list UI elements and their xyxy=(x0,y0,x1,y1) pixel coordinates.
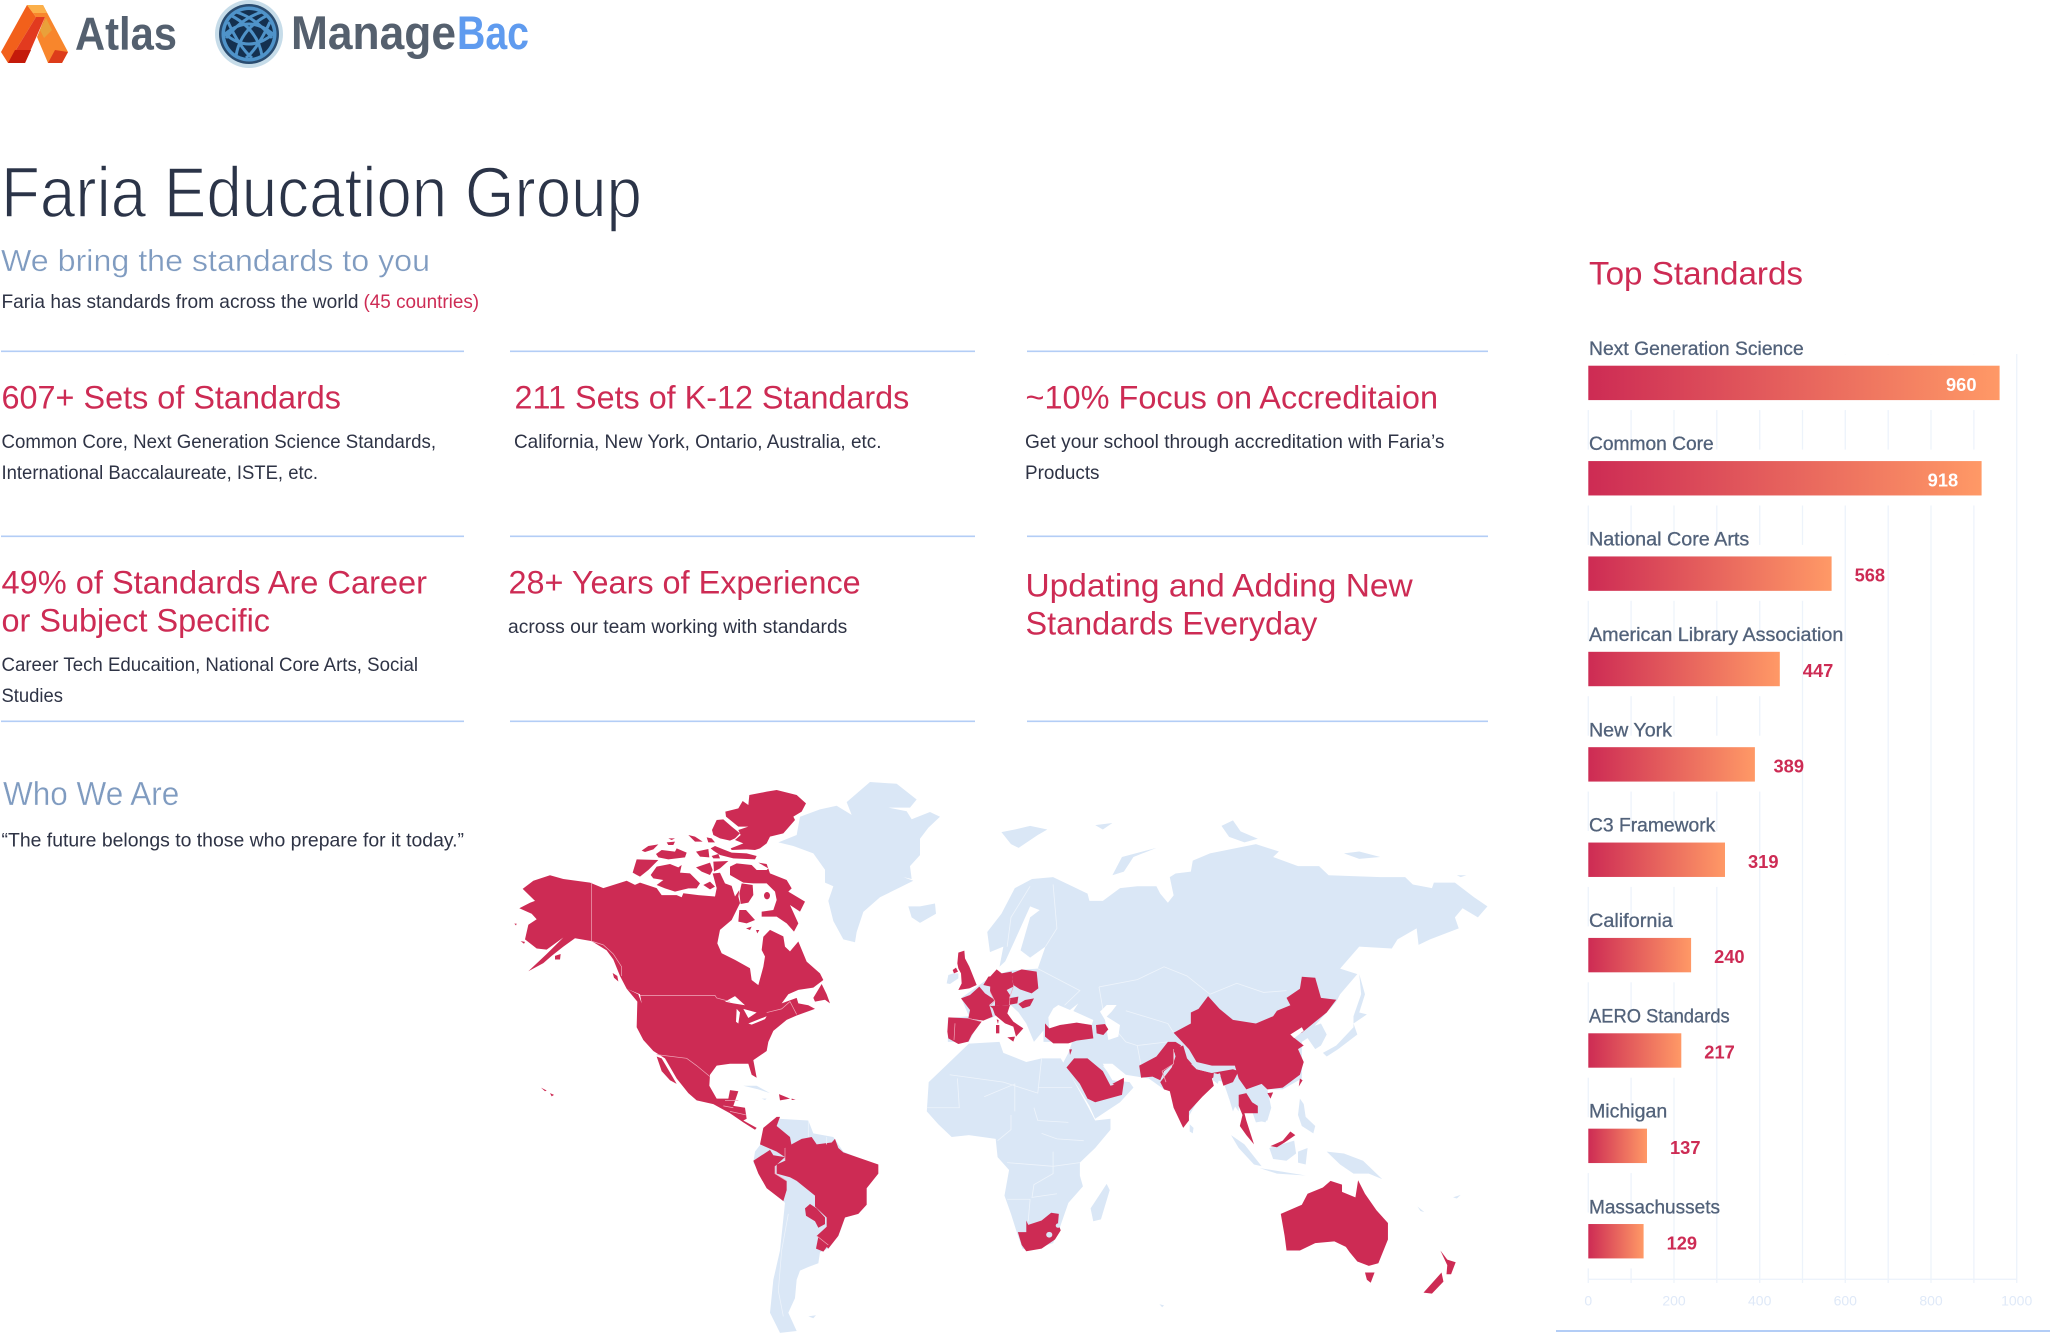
stat: updating and adding standards xyxy=(1026,568,1414,642)
South America xyxy=(753,1119,878,1333)
bar: Next Generation Science: Next Generation Science xyxy=(1589,339,1804,360)
bottom rule xyxy=(1556,1330,2050,1332)
bar: Next Generation Science xyxy=(1588,339,2000,400)
enclaves in light blue xyxy=(1046,1064,1221,1238)
bar: Michigan: 137 xyxy=(1670,1138,1700,1158)
x axis labels: 800 xyxy=(1919,1293,1943,1309)
Ireland xyxy=(947,973,958,984)
stat: 49% career or subject specific: Studies xyxy=(2,685,63,707)
Arabian sea inlet xyxy=(1103,1066,1126,1078)
stat: updating and adding standards: Updating and Adding New xyxy=(1026,568,1414,604)
stat: 211 sets of K-12 standards xyxy=(514,379,909,453)
x axis labels: 1000 xyxy=(2001,1293,2032,1309)
highlighted European countries xyxy=(947,951,1108,1055)
bar: Massachussets xyxy=(1588,1197,1720,1258)
stat: 49% career or subject specific: or Subject Specific xyxy=(2,603,270,639)
stat: 211 sets of K-12 standards: California, New York, Ontario, Australia, etc. xyxy=(514,431,882,453)
Iceland xyxy=(908,903,936,923)
highlighted countries of Asia, Africa and Oceania xyxy=(1018,977,1456,1294)
stat: 10% focus on accreditation: ~10% Focus on Accreditaion xyxy=(1026,379,1438,415)
islands in light blue xyxy=(1001,820,1466,1307)
stat: 607+ sets of standards: International Baccalaureate, ISTE, etc. xyxy=(2,462,318,484)
South American highlighted countries xyxy=(753,1117,878,1252)
bar: Common Core: 918 xyxy=(1928,470,1958,490)
bar: Common Core: Common Core xyxy=(1589,434,1714,455)
bar chart: top standards xyxy=(1577,339,2032,1309)
bar: AERO Standards xyxy=(1588,1006,1735,1068)
bar: National Core Arts xyxy=(1588,529,1885,591)
bar: Next Generation Science: 960 xyxy=(1946,375,1976,395)
intro sentence: (45 countries) xyxy=(364,291,479,313)
chart gridlines xyxy=(1588,354,2017,1283)
wordmark: Atlas: Atlas xyxy=(75,7,177,59)
country borders on light land xyxy=(927,884,1287,1221)
small North American islands xyxy=(514,924,830,1100)
heading: who we are: Who We Are xyxy=(3,775,179,812)
logo: Atlas xyxy=(1,5,177,63)
bar: Massachussets: Massachussets xyxy=(1589,1197,1720,1218)
x axis labels: 0 xyxy=(1584,1293,1592,1309)
stat: 211 sets of K-12 standards: 211 Sets of K-12 Standards xyxy=(514,379,909,415)
Eurasia xyxy=(948,844,1487,1126)
stat: 10% focus on accreditation xyxy=(1025,379,1445,484)
stat: 607+ sets of standards: 607+ Sets of Standards xyxy=(2,379,341,415)
stat: 28+ years of experience: 28+ Years of Experience xyxy=(508,564,861,600)
bar: Michigan: Michigan xyxy=(1589,1102,1667,1123)
title: Faria Education Group xyxy=(1,154,642,233)
bar: C3 Framework xyxy=(1588,816,1778,877)
wordmark: ManageBac: Manage xyxy=(291,6,456,59)
Belgium and Czechia in light blue xyxy=(980,986,1025,996)
x axis labels xyxy=(1584,1293,2032,1309)
bar: California: 240 xyxy=(1714,947,1745,967)
logo: ManageBac xyxy=(215,0,529,68)
icon: globe xyxy=(215,0,283,68)
bar: Massachussets: 129 xyxy=(1667,1233,1697,1253)
world map xyxy=(514,782,1487,1333)
map: Europe, Africa, Asia and Oceania xyxy=(927,820,1487,1307)
bar: American Library Association: 447 xyxy=(1803,661,1833,681)
stat: 10% focus on accreditation: Products xyxy=(1025,462,1100,484)
stat: 28+ years of experience xyxy=(508,564,861,638)
bar: New York xyxy=(1588,720,1804,782)
bar: AERO Standards: 217 xyxy=(1704,1043,1735,1063)
quote: “The future belongs to those who prepare for it today.” xyxy=(2,830,464,852)
intro sentence: Faria has standards from across the world xyxy=(2,291,358,313)
Baja California xyxy=(657,1056,677,1084)
bar: Michigan xyxy=(1588,1102,1700,1163)
bar: National Core Arts: 568 xyxy=(1855,566,1885,586)
x axis labels: 600 xyxy=(1834,1293,1857,1309)
bar: AERO Standards: AERO Standards xyxy=(1589,1006,1730,1027)
Black Sea and Caspian Sea xyxy=(1048,1003,1120,1040)
bar: American Library Association: American Library Association xyxy=(1589,625,1843,646)
x axis labels: 400 xyxy=(1748,1293,1772,1309)
bar: C3 Framework: 319 xyxy=(1748,852,1778,872)
stat: 607+ sets of standards: Common Core, Next Generation Science Standards, xyxy=(2,431,436,453)
icon: Atlas mountain mark xyxy=(1,5,68,63)
bar: New York: New York xyxy=(1589,720,1673,741)
stat: 607+ sets of standards xyxy=(2,379,436,484)
heading: top standards: Top Standards xyxy=(1589,255,1803,291)
stat: 49% career or subject specific xyxy=(2,564,427,707)
stat: 10% focus on accreditation: Get your school through accreditation with Faria’s xyxy=(1025,431,1445,453)
map: Canadian Arctic islands xyxy=(633,790,806,933)
bar: C3 Framework: C3 Framework xyxy=(1589,816,1716,837)
bar: National Core Arts: National Core Arts xyxy=(1589,529,1749,550)
panel: key statistics xyxy=(1,351,1488,721)
map: Europe and Turkey xyxy=(947,951,1120,1055)
bar: California xyxy=(1588,911,1745,972)
Africa xyxy=(927,1042,1110,1250)
logo: ManageBac: Bac xyxy=(457,6,529,59)
stat: updating and adding standards: Standards Everyday xyxy=(1026,606,1317,642)
North America xyxy=(519,873,823,1130)
bar: American Library Association xyxy=(1588,625,1843,686)
subtitle: We bring the standards to you xyxy=(1,243,430,278)
x axis labels: 200 xyxy=(1662,1293,1686,1309)
bar: New York: 389 xyxy=(1774,756,1804,776)
Caribbean islands xyxy=(743,1086,770,1100)
stat: 28+ years of experience: across our team working with standards xyxy=(508,616,848,638)
bar: Common Core xyxy=(1588,434,1982,495)
stat: 49% career or subject specific: Career Tech Educaition, National Core Arts, Social xyxy=(2,654,418,676)
Greenland xyxy=(778,782,940,942)
bar: California: California xyxy=(1589,911,1673,932)
stat: 49% career or subject specific: 49% of Standards Are Career xyxy=(2,564,427,600)
Great Lakes xyxy=(627,989,767,1025)
map: Americas and Greenland xyxy=(514,782,940,1333)
